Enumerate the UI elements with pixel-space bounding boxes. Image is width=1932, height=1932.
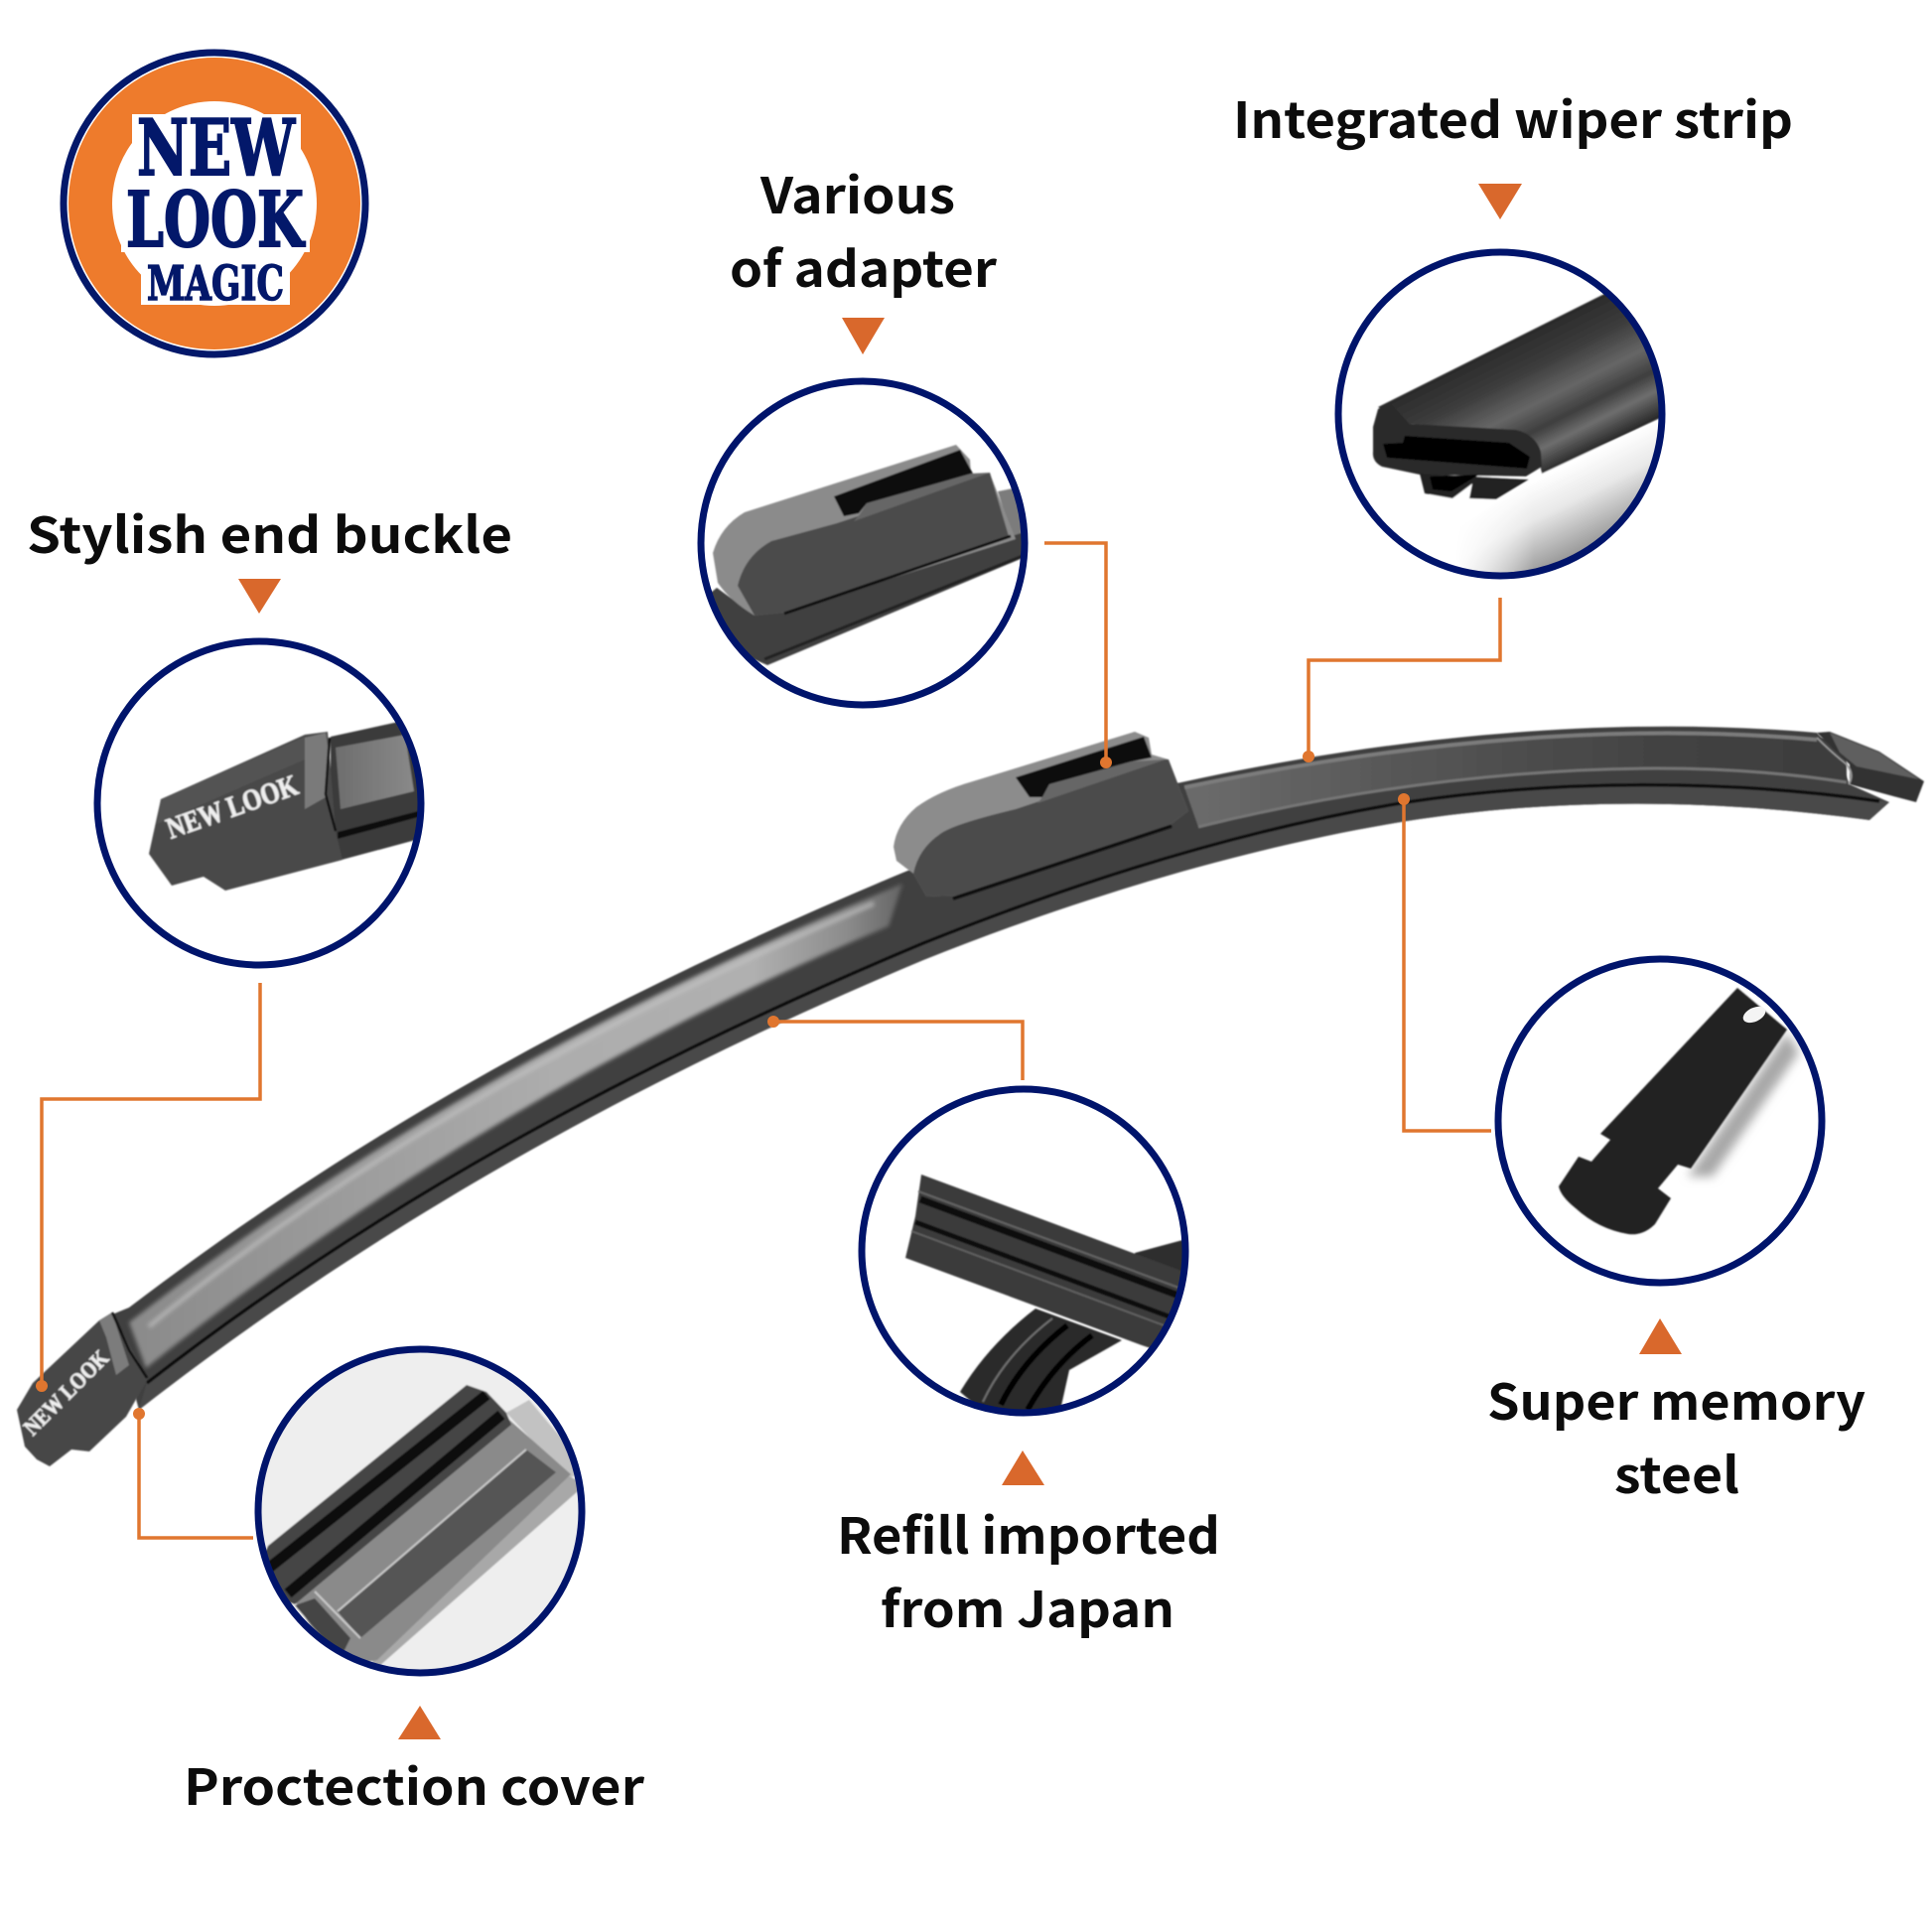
logo: New Look Magic badge: MAGIC <box>147 256 284 312</box>
label: refill imported from Japan: Refill imported <box>837 1497 1220 1569</box>
arrow: end buckle <box>238 579 281 614</box>
panel: various of adapter <box>695 381 1033 705</box>
arrow: protection cover <box>398 1706 441 1739</box>
label: super memory steel <box>1487 1363 1865 1508</box>
connector: wiper strip <box>1303 598 1500 762</box>
label: refill imported from Japan: from Japan <box>881 1571 1174 1642</box>
panel: integrated wiper strip <box>1338 252 1688 596</box>
label: protection cover: Proctection cover <box>184 1748 644 1820</box>
steel close-up image <box>1559 988 1799 1234</box>
logo: New Look Magic badge: NEW <box>137 103 296 194</box>
blade tip cap <box>1817 732 1924 802</box>
panel: super memory steel <box>1498 959 1822 1283</box>
arrow: refill <box>1002 1450 1044 1485</box>
buckle close-up image <box>149 715 427 891</box>
label: super memory steel: steel <box>1614 1437 1739 1508</box>
blade left spoiler highlight <box>129 884 902 1368</box>
cover close-up image <box>248 1349 586 1673</box>
arrow: wiper strip <box>1478 184 1522 219</box>
refill close-up image <box>905 1174 1186 1420</box>
label: various of adapter: of adapter <box>730 230 997 302</box>
connector: protection cover <box>133 1408 253 1538</box>
strip close-up image <box>1372 294 1658 572</box>
panel: protection cover <box>248 1349 586 1673</box>
label: various of adapter: Various <box>759 157 955 228</box>
connector: adapter <box>1044 543 1112 768</box>
wiper blade <box>17 727 1924 1466</box>
connector: end buckle <box>36 983 260 1392</box>
arrow: adapter <box>842 318 885 354</box>
logo: New Look Magic badge: LOOK <box>126 176 306 265</box>
left end buckle on blade: NEW LOOK <box>19 1345 113 1441</box>
connector: memory steel <box>1398 793 1491 1131</box>
label: super memory steel: Super memory <box>1487 1363 1865 1435</box>
centre adapter <box>894 732 1188 898</box>
arrow: memory steel <box>1639 1318 1682 1354</box>
label: integrated wiper strip: Integrated wiper strip <box>1233 81 1793 153</box>
label: stylish end buckle: Stylish end buckle <box>27 496 512 568</box>
adapter close-up image <box>695 445 1033 665</box>
label: refill imported from Japan <box>837 1497 1220 1642</box>
label: various of adapter <box>730 157 997 302</box>
panel: stylish end buckle <box>97 641 427 965</box>
panel: refill imported from Japan <box>862 1089 1186 1420</box>
connector: refill <box>767 1016 1023 1080</box>
buckle close-up image: NEW LOOK <box>162 768 303 846</box>
blade body <box>112 727 1889 1410</box>
blade right spoiler face <box>1184 733 1847 827</box>
left end buckle on blade <box>17 1312 147 1466</box>
logo: New Look Magic badge <box>64 53 365 354</box>
